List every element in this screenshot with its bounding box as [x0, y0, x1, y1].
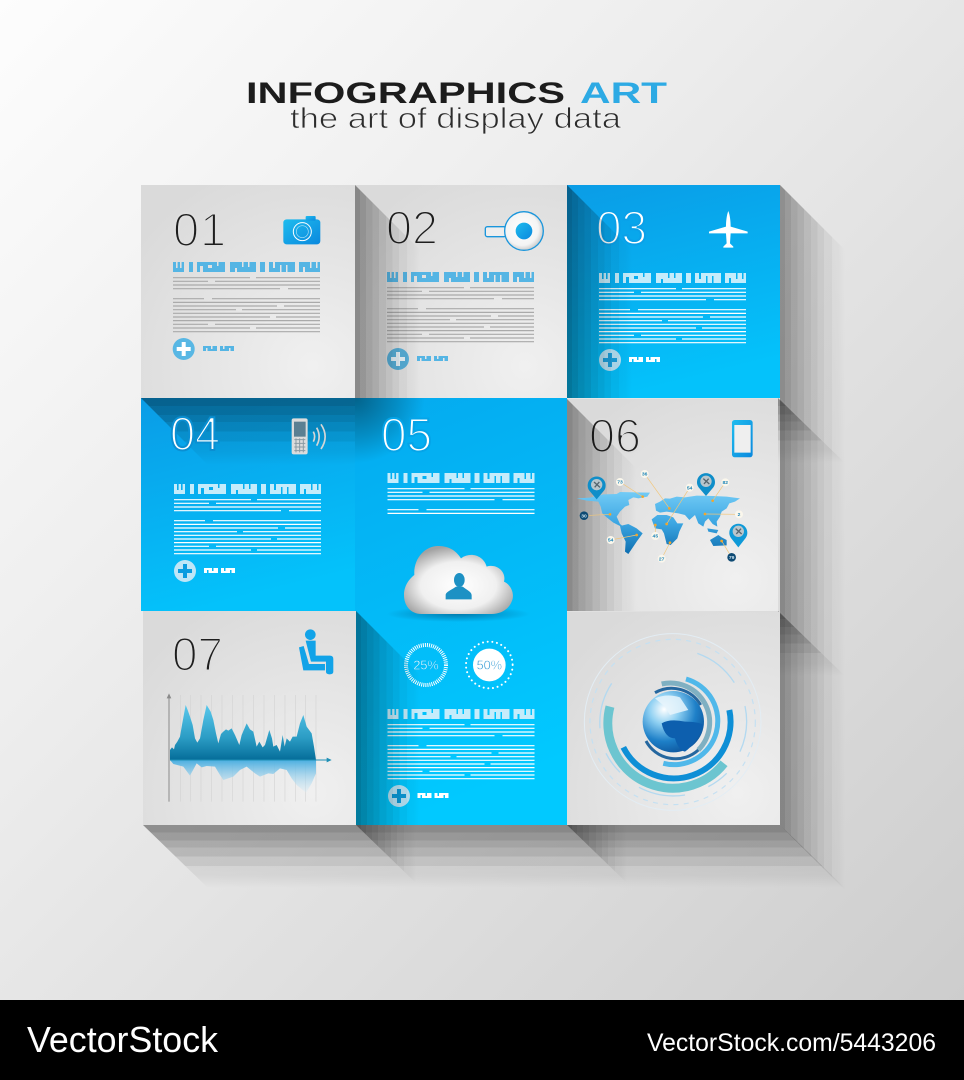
value labels: 73: [617, 480, 623, 486]
world map: [577, 470, 747, 563]
light blue ring: [663, 679, 718, 765]
text block: [599, 273, 746, 343]
number 07: 07: [172, 628, 223, 680]
text block: [174, 484, 321, 554]
continents: [577, 492, 740, 554]
title word: art: ART: [580, 77, 667, 110]
gauge 25 percent: [406, 645, 446, 685]
more button: [174, 560, 235, 582]
title: [246, 77, 667, 110]
gauge 25 percent: 25%: [413, 658, 439, 672]
target rings and globe: [584, 634, 761, 810]
teal ring: [608, 707, 724, 788]
number 04: 04: [170, 407, 220, 460]
side shadow: [567, 399, 636, 611]
value labels: [580, 470, 743, 563]
text block top: [388, 473, 534, 513]
top shadow: [141, 398, 355, 465]
globe: [643, 691, 704, 752]
side shadow: [567, 185, 632, 398]
value labels: 79: [729, 555, 735, 561]
more button: [173, 338, 234, 360]
data points: [609, 495, 723, 544]
cast shadows behind the cards: [143, 185, 845, 890]
panel 04: phone: [141, 398, 355, 611]
gauge 50 percent: 50%: [477, 658, 502, 672]
icon: plane: [709, 211, 748, 248]
number 05: 05: [381, 408, 432, 461]
area chart: [167, 693, 332, 802]
subtitle: the art of display data: [290, 103, 622, 135]
watermark logo: VectorStock: [27, 1019, 219, 1060]
corner shadow: [355, 398, 425, 463]
watermark bar: [0, 1000, 964, 1080]
grid lines: [180, 695, 316, 802]
number 06: 06: [589, 409, 641, 462]
icon: smartphone: [732, 420, 753, 457]
more button: [599, 349, 660, 371]
more button: [387, 348, 448, 370]
icon: toggle knob: [485, 212, 543, 250]
panel 09: globe: [567, 612, 780, 825]
more button: [388, 785, 448, 807]
blue ring: [623, 710, 731, 778]
number 03: 03: [596, 201, 647, 254]
side shadow: [356, 611, 420, 825]
text block: [387, 272, 534, 342]
connector lines: [584, 474, 739, 559]
text block: [173, 262, 320, 332]
title word: infographics: INFOGRAPHICS: [246, 77, 565, 110]
icon: cloud with user: [387, 546, 530, 622]
value labels: 82: [723, 480, 728, 486]
panel 07: area chart: [143, 611, 356, 825]
icon: mobile phone with waves: [292, 418, 325, 454]
vertical axis: [167, 697, 170, 802]
side shadow: [355, 185, 420, 398]
upper area: [170, 705, 316, 760]
panel 03: plane: [567, 185, 780, 398]
number 02: 02: [386, 201, 438, 254]
number 01: 01: [173, 203, 226, 256]
value labels: 36: [642, 472, 648, 478]
value labels: 54: [608, 538, 614, 544]
outer hairline ring: [584, 634, 761, 810]
icon: camera: [283, 216, 320, 244]
panel 01: camera: [141, 185, 355, 398]
value labels: 2: [738, 512, 741, 518]
grey-blue ring: [662, 683, 710, 750]
value labels: 45: [653, 534, 658, 540]
dark ring: [646, 688, 701, 759]
panel 06: world map: [567, 399, 778, 611]
text block bottom: [388, 709, 534, 779]
gauge 50 percent: [466, 642, 513, 688]
thin arcs: [600, 653, 747, 796]
watermark id: VectorStock.com/5443206: [647, 1029, 936, 1057]
dashed ring: [590, 639, 755, 805]
panel 02: knob: [355, 185, 567, 398]
location pins: [588, 473, 747, 547]
baseline arrow: [170, 758, 328, 761]
panel 05: cloud and percentages: [355, 398, 567, 825]
value labels: 27: [659, 556, 665, 562]
reflected area: [170, 760, 316, 793]
value labels: 54: [687, 485, 693, 491]
value labels: 30: [581, 513, 587, 519]
icon: seated person: [299, 629, 333, 674]
